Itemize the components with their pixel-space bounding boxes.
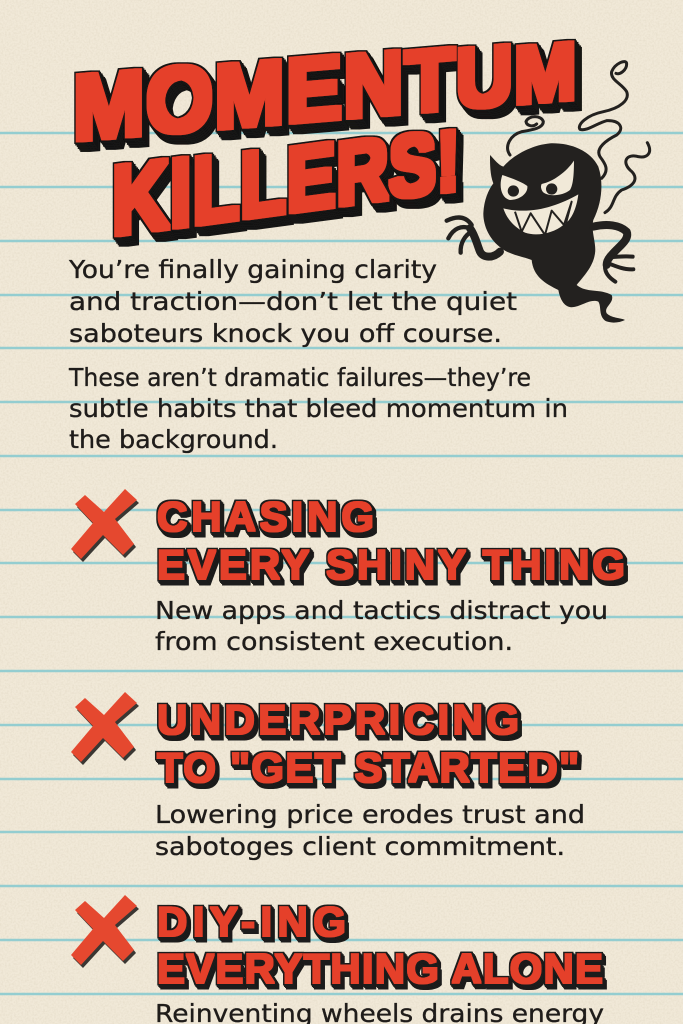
monster eyes <box>501 161 574 200</box>
monster grin <box>503 194 578 235</box>
intro paragraph 1: and traction—don’t let the quiet <box>69 287 517 316</box>
item 2: underpricing to get started <box>71 692 585 861</box>
description <box>155 596 608 656</box>
heading: EVERY SHINY THING <box>157 541 625 588</box>
heading: EVERYTHING ALONE <box>157 945 603 992</box>
icon: red X <box>71 692 139 765</box>
intro paragraph 2 <box>68 363 568 454</box>
heading: DIY-ING <box>157 898 346 945</box>
intro paragraph 2: subtle habits that bleed momentum in <box>69 394 568 423</box>
heading: UNDERPRICING <box>157 696 519 743</box>
heading: CHASING <box>157 493 374 540</box>
description: New apps and tactics distract you <box>155 596 608 625</box>
description <box>155 800 585 861</box>
intro paragraph 2: These aren’t dramatic failures—they’re <box>68 363 531 392</box>
icon: black monster <box>447 62 650 323</box>
description: sabotoges client commitment. <box>155 832 565 861</box>
intro paragraph 1: saboteurs knock you off course. <box>69 319 502 348</box>
title: MOMENTUM <box>73 14 578 160</box>
intro paragraph 1 <box>68 255 517 348</box>
heading <box>157 493 625 588</box>
intro paragraph 2: the background. <box>69 425 278 454</box>
monster body <box>483 143 625 323</box>
title: KILLERS! <box>112 100 461 256</box>
item 3: DIY-ing everything alone <box>71 895 604 1024</box>
intro paragraph 1: You’re finally gaining clarity <box>68 255 437 284</box>
title <box>73 14 578 256</box>
heading <box>157 898 603 992</box>
description: from consistent execution. <box>155 627 513 656</box>
monster arms and tendrils <box>447 62 650 282</box>
icon: red X <box>71 895 139 968</box>
icon: red X <box>71 489 139 562</box>
heading: TO "GET STARTED" <box>157 744 579 791</box>
item 1: chasing every shiny thing <box>71 489 625 656</box>
heading <box>157 696 579 791</box>
description: Lowering price erodes trust and <box>155 800 585 829</box>
